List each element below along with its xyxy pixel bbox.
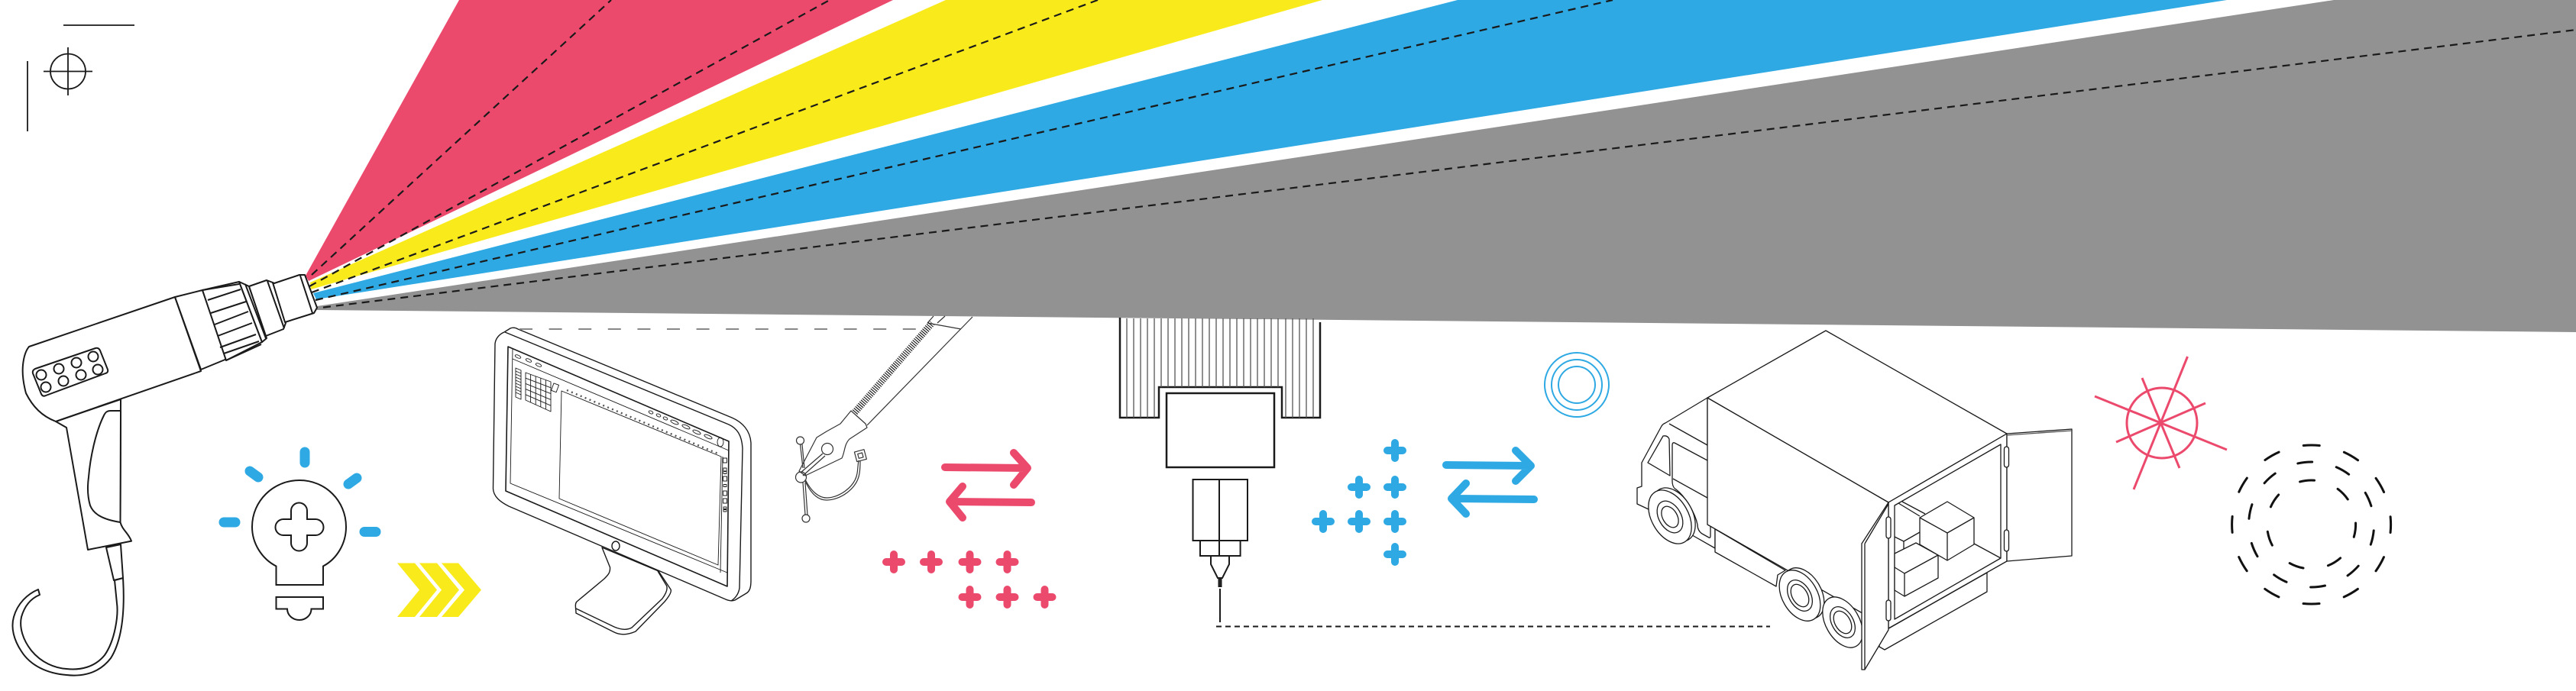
- icon: plotter head: [1120, 318, 1320, 622]
- colour rays: [306, 0, 2576, 332]
- blue plus signs: [1316, 443, 1403, 562]
- cargo box large: [1920, 502, 1974, 560]
- ring flange: [239, 282, 267, 342]
- ray: yellow: [310, 0, 1322, 289]
- monitor body: [494, 328, 751, 601]
- cab door: [1672, 443, 1710, 538]
- nozzle tip: [273, 275, 317, 322]
- gun handle: [56, 399, 131, 550]
- rear skirt: [1879, 573, 1987, 650]
- pink plus signs: [886, 554, 1053, 605]
- screen contents: [510, 349, 729, 573]
- handle grip: [88, 411, 121, 522]
- bulb plus: [276, 502, 324, 551]
- truck side panel: [1707, 398, 1888, 630]
- monitor screen: [506, 347, 729, 586]
- door hinges: [1886, 447, 2009, 621]
- monitor stand: [575, 547, 671, 634]
- gun body: [23, 297, 201, 421]
- blue concentric circles: [1545, 353, 1609, 417]
- pink asterisk circle: [2095, 357, 2227, 489]
- bulb cap: [277, 597, 323, 620]
- gun cord neck: [106, 544, 123, 580]
- dashed path line to truck: [1216, 626, 1770, 628]
- cab window: [1648, 436, 1670, 476]
- rear left door: [1862, 502, 1888, 670]
- pen nib: [799, 411, 867, 476]
- ray: blue: [313, 0, 2227, 299]
- ray: pink: [306, 0, 893, 281]
- menu items: [515, 354, 723, 447]
- black dashed concentric circles: [2232, 445, 2391, 604]
- gun cord: [12, 578, 124, 676]
- rear right door: [2007, 429, 2072, 561]
- bezier curve: [805, 461, 860, 500]
- truck cab: [1637, 398, 1715, 548]
- pink exchange arrows: [945, 453, 1031, 518]
- bulb rays: [224, 452, 376, 531]
- tool strip: [516, 368, 521, 399]
- icon: heat gun: [12, 275, 317, 676]
- palette grid: [526, 373, 551, 412]
- dashed guide line: [519, 328, 921, 330]
- side skirt: [1715, 529, 1785, 586]
- pen hatch band: [855, 323, 932, 412]
- monitor logo: [612, 541, 620, 551]
- icon: delivery truck: [1637, 331, 2072, 670]
- side icons: [723, 458, 727, 512]
- bezier handles: [796, 437, 804, 444]
- rear opening frame: [1888, 434, 2007, 628]
- rear wheel one: [1771, 560, 1833, 628]
- head box: [1167, 393, 1274, 467]
- cargo interior: [1895, 444, 2001, 619]
- front wheel: [1639, 480, 1704, 551]
- cargo box small: [1895, 543, 1938, 596]
- icon: light bulb with plus: [224, 452, 376, 620]
- ruler ticks: [567, 390, 720, 454]
- monitor inner edge: [505, 332, 743, 601]
- ray: gray: [317, 0, 2576, 332]
- rear wheel two: [1814, 590, 1871, 654]
- truck roof: [1707, 331, 2007, 502]
- registration target mark: [28, 25, 134, 131]
- dashed ray centre lines: [309, 0, 2576, 308]
- bulb outline: [252, 480, 346, 585]
- control panel: [33, 348, 108, 396]
- tool holder: [1193, 480, 1248, 622]
- ribbed ring: [202, 282, 262, 360]
- icon: computer monitor: [494, 328, 751, 634]
- icon: vector pen tool: [796, 316, 972, 522]
- blue exchange arrows: [1446, 450, 1534, 514]
- yellow chevrons: [397, 563, 481, 617]
- gun collar: [175, 290, 227, 370]
- nozzle base: [249, 280, 286, 336]
- pen shaft: [867, 316, 972, 425]
- hatched carriage: [1120, 318, 1320, 418]
